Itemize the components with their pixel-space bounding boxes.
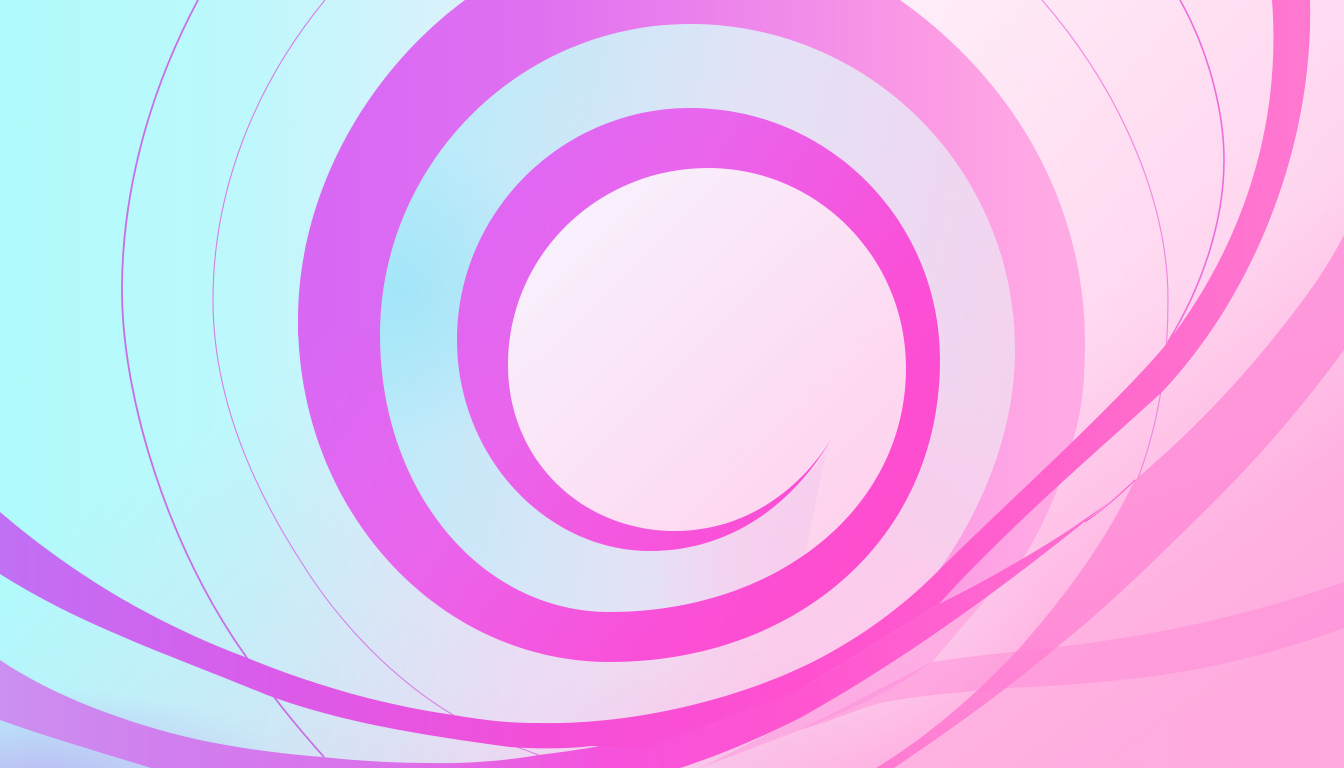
- pale horizontal ribbon: [800, 582, 1344, 730]
- spiral centre: [508, 168, 906, 566]
- spiral inner disc: [380, 24, 1060, 768]
- spiral outer turn: [298, 0, 1085, 604]
- pale wedge under main ribbon: [700, 593, 991, 768]
- spiral main band: [298, 108, 940, 662]
- pale diagonal ribbon: [876, 235, 1344, 768]
- wedge tip stroke: [1085, 480, 1135, 522]
- lower magenta ribbon: [0, 480, 1135, 768]
